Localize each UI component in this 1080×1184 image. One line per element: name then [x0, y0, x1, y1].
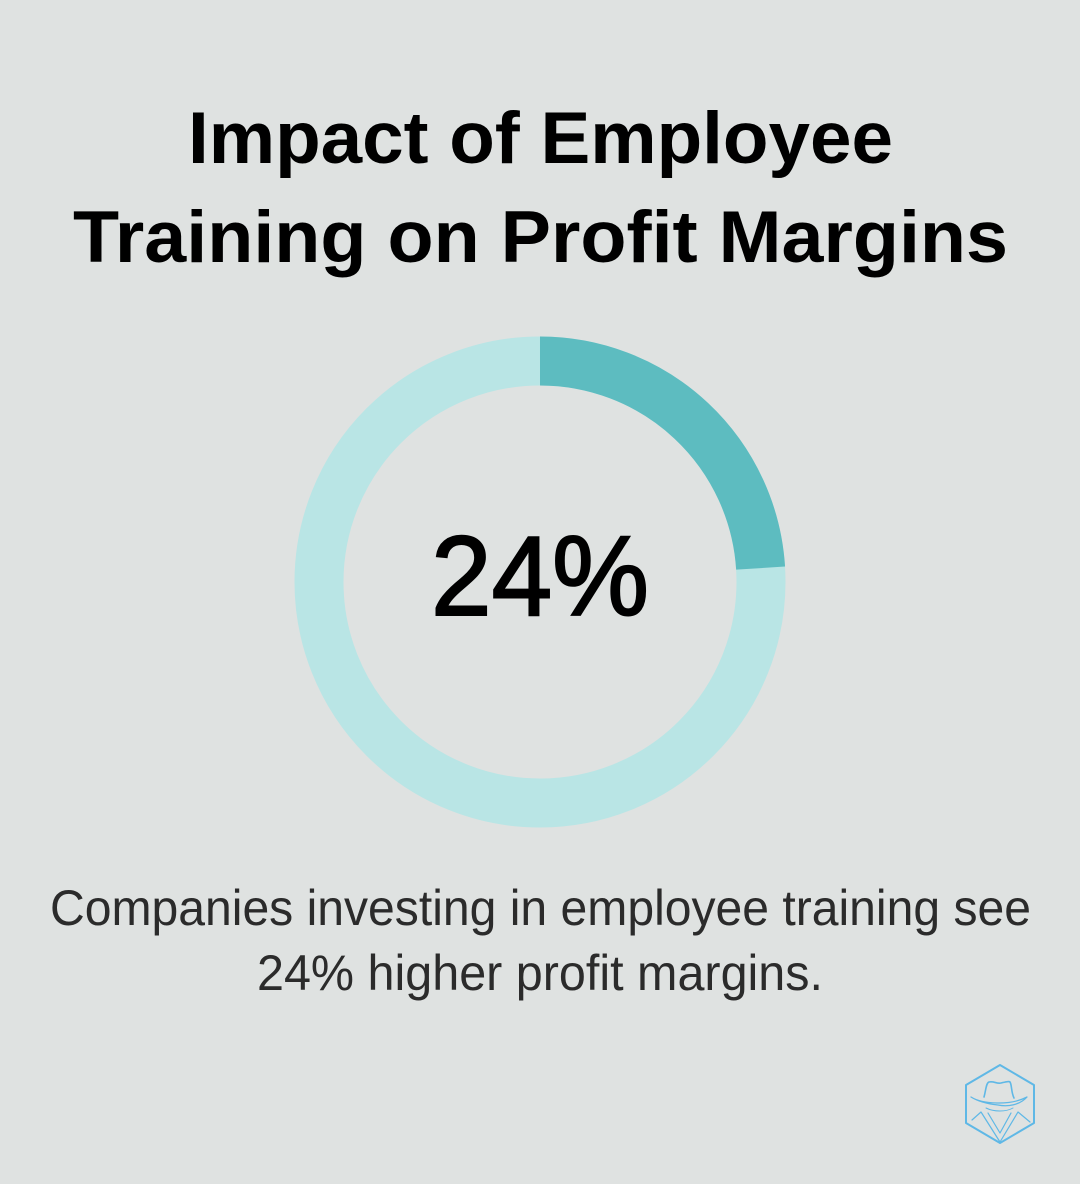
description text: Companies investing in employee training see: [50, 880, 1031, 936]
icon: logo, hexagon with hat spy: [966, 1065, 1034, 1143]
title: Training on Profit Margins: [73, 197, 1008, 278]
title: [73, 98, 1008, 278]
center value: 24%: [431, 513, 649, 639]
description text: [50, 880, 1031, 1001]
donut chart: 24%: [319, 361, 761, 803]
title: Impact of Employee: [188, 98, 893, 179]
description text: 24% higher profit margins.: [257, 945, 823, 1001]
